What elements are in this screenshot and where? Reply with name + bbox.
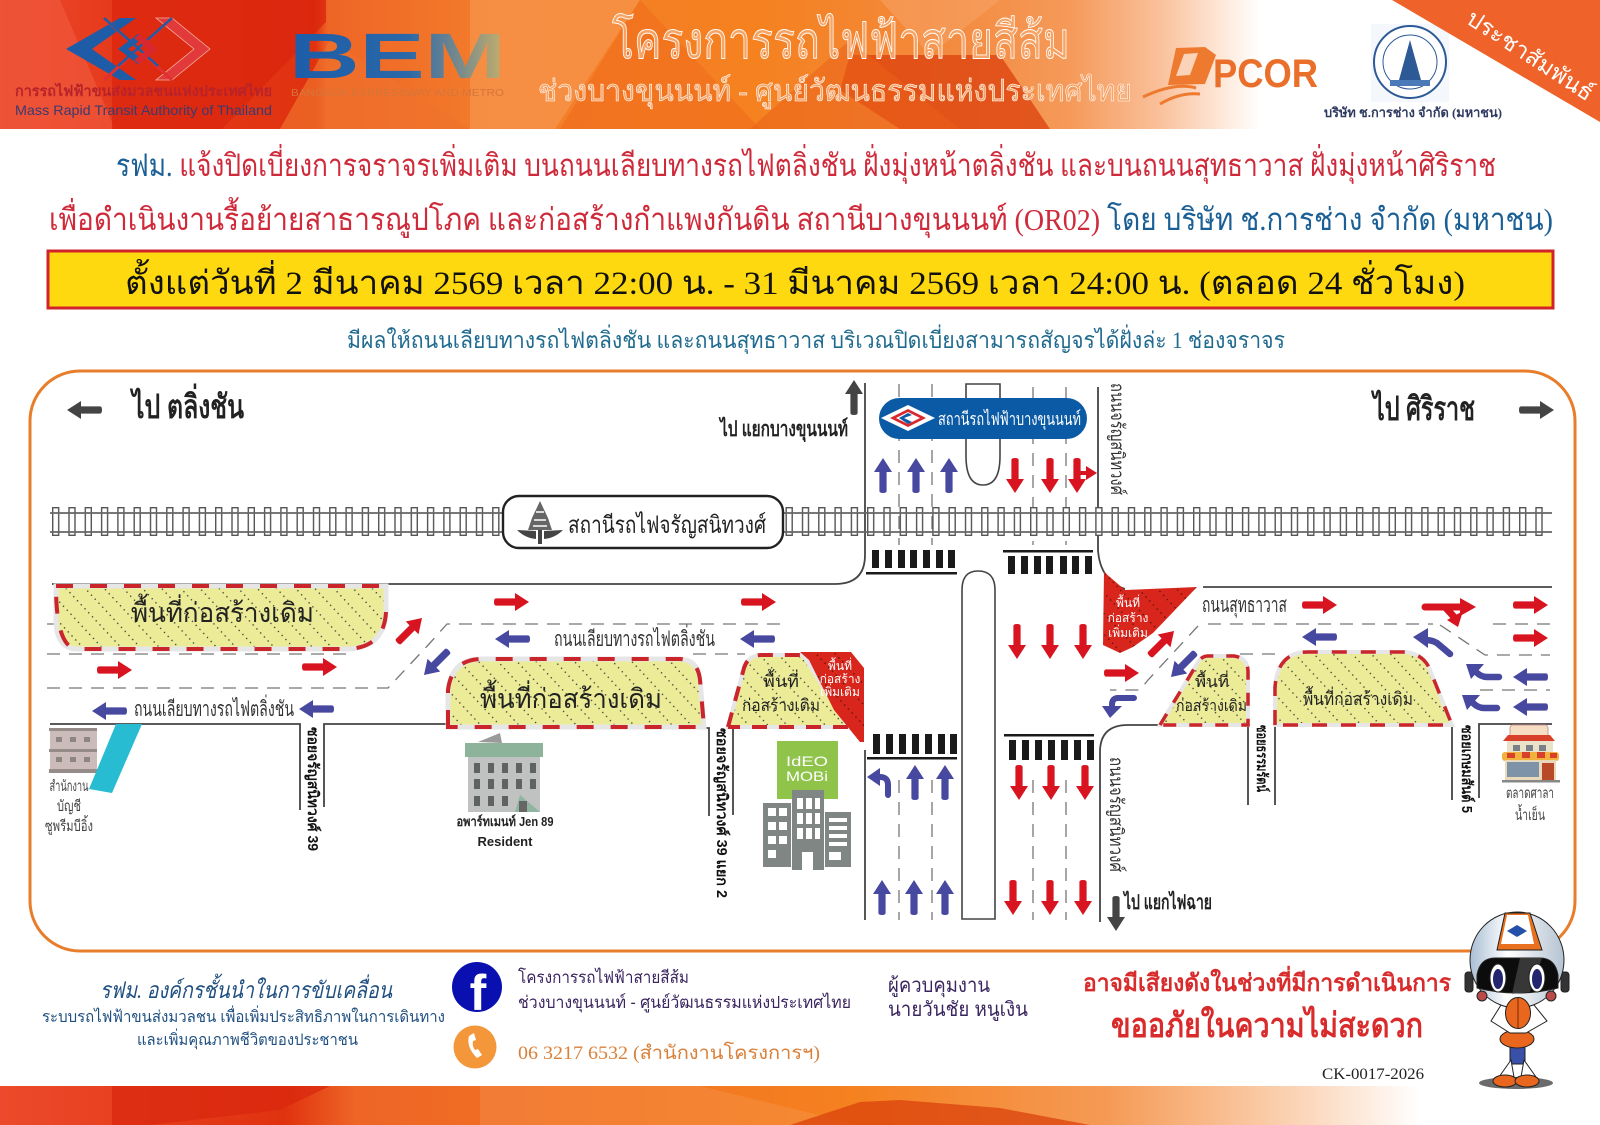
construction area: additional, right: ก่อสร้าง (1108, 611, 1148, 625)
soi labels: ซอยจรัญสนิทวงศ์ 39 (304, 727, 322, 851)
apology message: อาจมีเสียงดังในช่วงที่มีการดำเนินการ (1083, 965, 1451, 997)
direction: to Bang Khun Non junction (719, 380, 863, 443)
supervisor (888, 975, 1028, 1022)
construction area: existing, small right: พื้นที่ (1195, 670, 1229, 691)
landmark: Ideo Mobi: IdEO (786, 753, 828, 769)
direction: to Bang Khun Non junction: ไป แยกบางขุนนนท์ (719, 416, 848, 443)
logo: CH. Karnchang (1371, 24, 1449, 102)
construction area: existing, next to additional: พื้นที่ (763, 669, 799, 691)
logo: BEM (289, 20, 506, 99)
footer slogan (42, 973, 445, 1050)
ribbon: public relations: ประชาสัมพันธ์ (1462, 5, 1599, 106)
footer slogan: รฟม. องค์กรชั้นนำในการขับเคลื่อน (100, 973, 393, 1003)
footer band (0, 1086, 1420, 1125)
document code: CK-0017-2026 (1322, 1066, 1424, 1083)
construction area: existing, small right: ก่อสร้างเดิม (1176, 697, 1247, 715)
logo: BEM: BANGKOK EXPRESSWAY AND METRO (291, 87, 504, 99)
landmark: accounting office building (45, 724, 142, 835)
impact note: มีผลให้ถนนเลียบทางรถไฟตลิ่งชัน และถนนสุทธาวาส บริเวณปิดเบี่ยงสามารถสัญจรได้ฝั่งล่ะ 1 ช่องจราจร (347, 324, 1285, 354)
footer slogan: และเพิ่มคุณภาพชีวิตของประชาชน (137, 1028, 358, 1050)
construction area: additional, right (1103, 572, 1197, 653)
landmark: accounting office building: สำนักงาน (50, 778, 88, 795)
construction area: existing, large right: พื้นที่ก่อสร้างเดิม (1303, 686, 1413, 709)
construction area: existing, next to additional (728, 655, 848, 727)
contact: project name (518, 967, 851, 1013)
construction area: additional, centre: ก่อสร้าง (820, 672, 860, 686)
crosswalks (866, 550, 1094, 760)
soi labels (304, 725, 1476, 898)
soi labels: ซอยเกษมสันต์ 5 (1458, 725, 1476, 813)
construction area: existing, far left: พื้นที่ก่อสร้างเดิม (131, 593, 314, 628)
construction area: existing, centre left: พื้นที่ก่อสร้างเดิม (480, 679, 662, 714)
direction: to Fai Chai junction: ไป แยกไฟฉาย (1123, 890, 1212, 914)
panel: traffic map (30, 371, 1575, 951)
logo text: MRTA name: Mass Rapid Transit Authority of Thailand (15, 102, 272, 118)
soi labels: ซอยธรรมรัตน์ (1253, 725, 1271, 793)
landmark: apartment Jen 89: Resident (478, 834, 533, 849)
road name labels: ถนนเลียบทางรถไฟตลิ่งชัน (134, 694, 294, 721)
apology message (1083, 965, 1451, 1045)
construction area: additional, right: เพิ่มเติม (1108, 624, 1148, 640)
landmark: apartment Jen 89: อพาร์ทเมนท์ Jen 89 (456, 814, 554, 829)
logo: PCOR: PCOR (1213, 52, 1318, 96)
footer slogan: ระบบรถไฟฟ้าขนส่งมวลชน เพื่อเพิ่มประสิทธิภาพในการเดินทาง (42, 1005, 445, 1026)
company caption: บริษัท ช.การช่าง จำกัด (มหาชน) (1324, 105, 1502, 120)
contact: phone number: 06 3217 6532 (สำนักงานโครงการฯ) (518, 1041, 820, 1064)
construction area: additional, centre: พื้นที่ (828, 657, 852, 673)
main title (538, 13, 1132, 110)
logo text: MRTA name: การรถไฟฟ้าขนส่งมวลชนแห่งประเทศไทย (15, 82, 272, 100)
landmark: apartment Jen 89 (456, 733, 554, 849)
logo text: MRTA name (15, 82, 272, 118)
road name labels: ถนนสุทธาวาส (1202, 594, 1287, 618)
construction area: existing, next to additional: ก่อสร้างเดิม (742, 696, 820, 715)
supervisor: ผู้ควบคุมงาน (888, 975, 990, 998)
landmark: Sala Nam Yen market: ตลาดศาลา (1506, 785, 1554, 802)
mascot (1465, 912, 1569, 1089)
direction: to Siriraj: ไป ศิริราช (1371, 389, 1475, 427)
main title: ช่วงบางขุนนนท์ - ศูนย์วัฒนธรรมแห่งประเทศไทย (538, 73, 1132, 110)
red arrow: straight with right turn (1068, 458, 1097, 493)
lane markings (47, 384, 1550, 920)
contact: project name: ช่วงบางขุนนนท์ - ศูนย์วัฒนธรรมแห่งประเทศไทย (518, 992, 851, 1013)
apology message: ขออภัยในความไม่สะดวก (1111, 1005, 1423, 1045)
landmark: accounting office building: บัญชี (57, 798, 81, 815)
construction area: additional, centre (800, 652, 864, 742)
construction area: additional, centre: เพิ่มเติม (820, 683, 860, 699)
construction area: existing, large right (1275, 652, 1452, 725)
direction: to Taling Chan: ไป ตลิ่งชัน (130, 383, 244, 425)
construction area: existing, far left (56, 586, 386, 649)
red arrows: straight (97, 458, 1548, 915)
logo: PCOR (1143, 47, 1318, 104)
main title: โครงการรถไฟฟ้าสายสีส้ม (612, 13, 1070, 69)
landmark: Sala Nam Yen market: น้ำเย็น (1515, 804, 1545, 824)
construction area: additional, right: พื้นที่ (1116, 594, 1140, 610)
landmark: accounting office building: ซูพรีมบีอิ้ง (45, 815, 93, 835)
landmark: Ideo Mobi: MOBi (786, 768, 828, 784)
logo: BEM: BEM (289, 20, 506, 92)
ribbon: public relations (1392, 0, 1600, 122)
construction area: existing, small right (1160, 656, 1248, 725)
header band (0, 0, 1260, 129)
station label: Bang Khun Non MRT: สถานีรถไฟฟ้าบางขุนนนท์ (938, 408, 1081, 430)
soi labels: ซอยจรัญสนิทวงศ์ 39 แยก 2 (713, 728, 731, 898)
road name labels: ถนนจรัญสนิทวงศ์ (1106, 383, 1128, 495)
logo: MRTA chevrons (66, 18, 210, 80)
icon: phone (454, 1026, 496, 1068)
headline line 2: เพื่อดำเนินงานรื้อย้ายสาธารณูปโภค และก่อสร้างกำแพงกันดิน สถานีบางขุนนนท์ (OR02) โดย บริษัท ช.การช่าง จำกัด (มหาชน) (49, 197, 1553, 239)
road edge lines (50, 383, 1552, 922)
station label: Charan Sanitwong railway: สถานีรถไฟจรัญสนิทวงศ์ (568, 511, 766, 539)
road name labels: ถนนเลียบทางรถไฟตลิ่งชัน (554, 624, 715, 651)
station label: Charan Sanitwong railway (503, 496, 783, 548)
icon: facebook: f (470, 965, 487, 1021)
road name labels: ถนนจรัญสนิทวงศ์ (1105, 757, 1127, 872)
icon: facebook (452, 962, 502, 1021)
blue arrows: straight (92, 458, 1548, 915)
railway track (50, 507, 1552, 536)
supervisor: นายวันชัย หนูเงิน (888, 999, 1028, 1022)
direction: to Taling Chan (67, 383, 244, 425)
blue arrows: turning (867, 628, 1499, 795)
road name labels (134, 383, 1287, 872)
landmark: Sala Nam Yen market (1502, 725, 1560, 824)
red arrow: fork (1425, 598, 1476, 627)
landmark: Ideo Mobi (763, 741, 851, 870)
contact: project name: โครงการรถไฟฟ้าสายสีส้ม (518, 967, 689, 987)
station label: Bang Khun Non MRT (879, 398, 1087, 439)
construction area: existing, centre left (448, 659, 704, 727)
direction: to Fai Chai junction (1107, 890, 1212, 931)
date banner (48, 251, 1553, 308)
date banner: ตั้งแต่วันที่ 2 มีนาคม 2569 เวลา 22:00 น. - 31 มีนาคม 2569 เวลา 24:00 น. (ตลอด 24 ชั่วโมง) (125, 259, 1465, 302)
